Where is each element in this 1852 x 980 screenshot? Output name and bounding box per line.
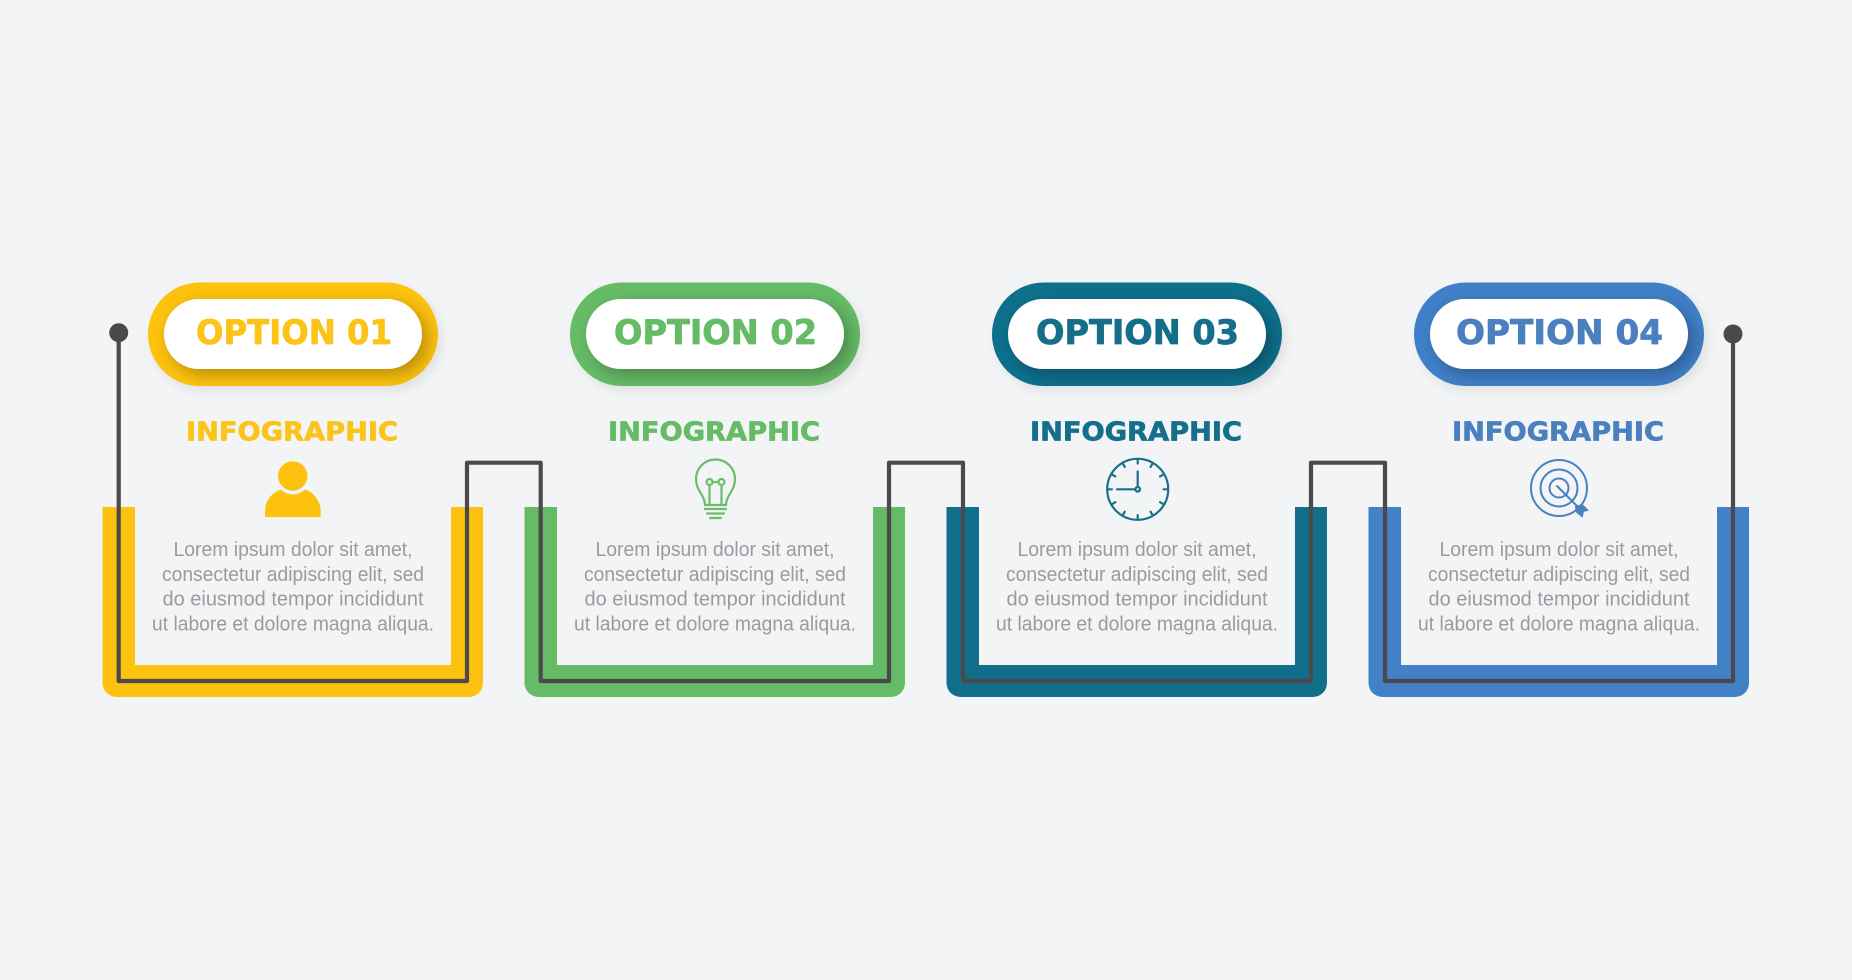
U-shaped frame 04 [1368,507,1749,697]
text block 01: Lorem ipsum dolor sit amet, [174,539,412,561]
heading 02: INFOGRAPHIC [608,418,820,448]
text block 04: consectetur adipiscing elit, sed [1428,564,1690,586]
text block 03: consectetur adipiscing elit, sed [1006,564,1268,586]
text block 01: ut labore et dolore magna aliqua. [152,614,434,636]
text block 04 [1418,539,1700,636]
text block 04: ut labore et dolore magna aliqua. [1418,614,1700,636]
text block 03: ut labore et dolore magna aliqua. [996,614,1278,636]
pill 02: OPTION 02 [614,313,817,353]
text block 02: ut labore et dolore magna aliqua. [574,614,856,636]
heading 04: INFOGRAPHIC [1452,418,1664,448]
text block 02 [574,539,856,636]
text block 03: Lorem ipsum dolor sit amet, [1018,539,1256,561]
panel: option 01 [102,282,483,697]
panel: option 03 [946,282,1327,697]
text block 03: do eiusmod tempor incididunt [1006,588,1268,610]
text block 01 [152,539,434,636]
pill 02 [570,282,860,386]
text block 01: do eiusmod tempor incididunt [162,588,424,610]
panel: option 02 [524,282,905,697]
panel: option 04 [1368,282,1749,697]
icon: clock [1107,459,1168,520]
pill 01 [148,282,438,386]
heading 01: INFOGRAPHIC [186,418,398,448]
connector line [109,323,1743,681]
text block 04: do eiusmod tempor incididunt [1428,588,1690,610]
end dot [1724,324,1742,344]
U-shaped frame 01 [102,507,483,697]
text block 02: do eiusmod tempor incididunt [584,588,846,610]
heading 03: INFOGRAPHIC [1030,418,1242,448]
text block 02: consectetur adipiscing elit, sed [584,564,846,586]
text block 01: consectetur adipiscing elit, sed [162,564,424,586]
icon: light bulb [696,460,735,518]
text block 03 [996,539,1278,636]
text block 04: Lorem ipsum dolor sit amet, [1440,539,1678,561]
text block 02: Lorem ipsum dolor sit amet, [596,539,834,561]
start dot [109,323,128,342]
pill 03: OPTION 03 [1036,313,1239,353]
pill 03 [992,282,1282,386]
pill 01: OPTION 01 [196,313,392,353]
pill 04 [1414,282,1704,386]
icon: target with arrow [1531,460,1587,516]
pill 04: OPTION 04 [1456,313,1663,353]
U-shaped frame 03 [946,507,1327,697]
U-shaped frame 02 [524,507,905,697]
icon: person [265,461,321,517]
